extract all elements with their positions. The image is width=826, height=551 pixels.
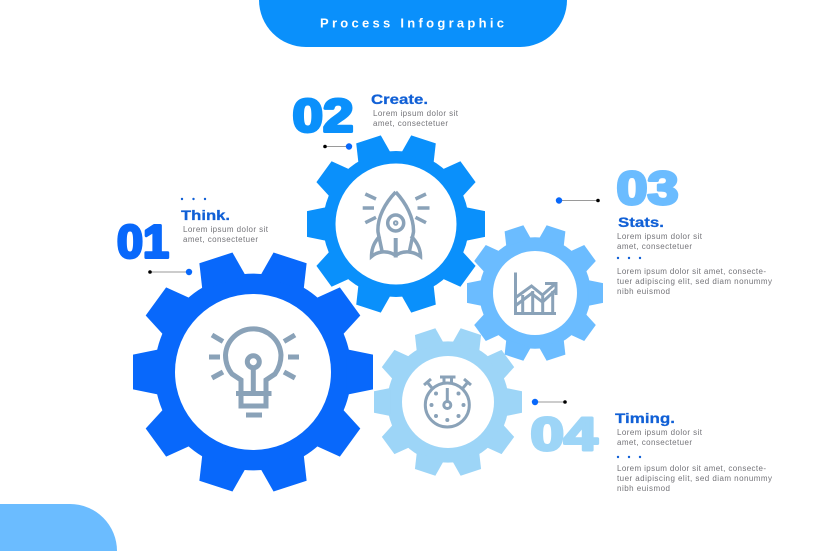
description: amet, consectetuer [373,119,448,128]
description [617,428,703,447]
dots [181,198,206,200]
panel: step 4 text [530,399,772,493]
connector [148,269,192,275]
description [183,225,269,244]
icon: light bulb [209,329,299,415]
corner shape [0,504,117,551]
connector [323,143,352,150]
icon: rocket [363,192,430,258]
description: amet, consectetuer [617,242,692,251]
description: amet, consectetuer [617,438,692,447]
long description: Lorem ipsum dolor sit amet, consecte- [617,464,766,473]
panel: step 3 gear [467,224,603,362]
connector [532,399,567,405]
long description: tuer adipiscing elit, sed diam nonummy [617,277,772,286]
panel: step 1 gear [133,251,373,493]
panel: step 1 text [117,198,269,275]
icon: growth chart [515,272,556,314]
heading: Stats. [618,214,664,230]
long description: Lorem ipsum dolor sit amet, consecte- [617,267,766,276]
long description: nibh euismod [617,287,670,296]
description: Lorem ipsum dolor sit [617,232,703,241]
connector [556,197,600,204]
number 02: 02 [292,90,354,142]
description: amet, consectetuer [183,235,258,244]
long description [617,464,772,493]
number 04: 04 [530,408,598,460]
description [373,109,459,128]
description: Lorem ipsum dolor sit [617,428,703,437]
title: Process Infographic [320,16,506,30]
icon: stopwatch [424,377,471,427]
dots [617,456,641,458]
description: Lorem ipsum dolor sit [183,225,269,234]
panel: step 4 gear [374,327,522,477]
dots [617,257,641,259]
panel: step 3 text [556,162,772,296]
panel: step 2 gear [307,134,485,314]
panel: step 2 text [292,90,459,150]
description: Lorem ipsum dolor sit [373,109,459,118]
long description [617,267,772,296]
heading: Create. [371,91,428,107]
heading: Timing. [615,410,675,426]
description [617,232,703,251]
number 01: 01 [117,216,169,268]
number 03: 03 [616,162,678,214]
long description: nibh euismod [617,484,670,493]
long description: tuer adipiscing elit, sed diam nonummy [617,474,772,483]
heading: Think. [181,207,230,223]
header banner [259,0,567,47]
